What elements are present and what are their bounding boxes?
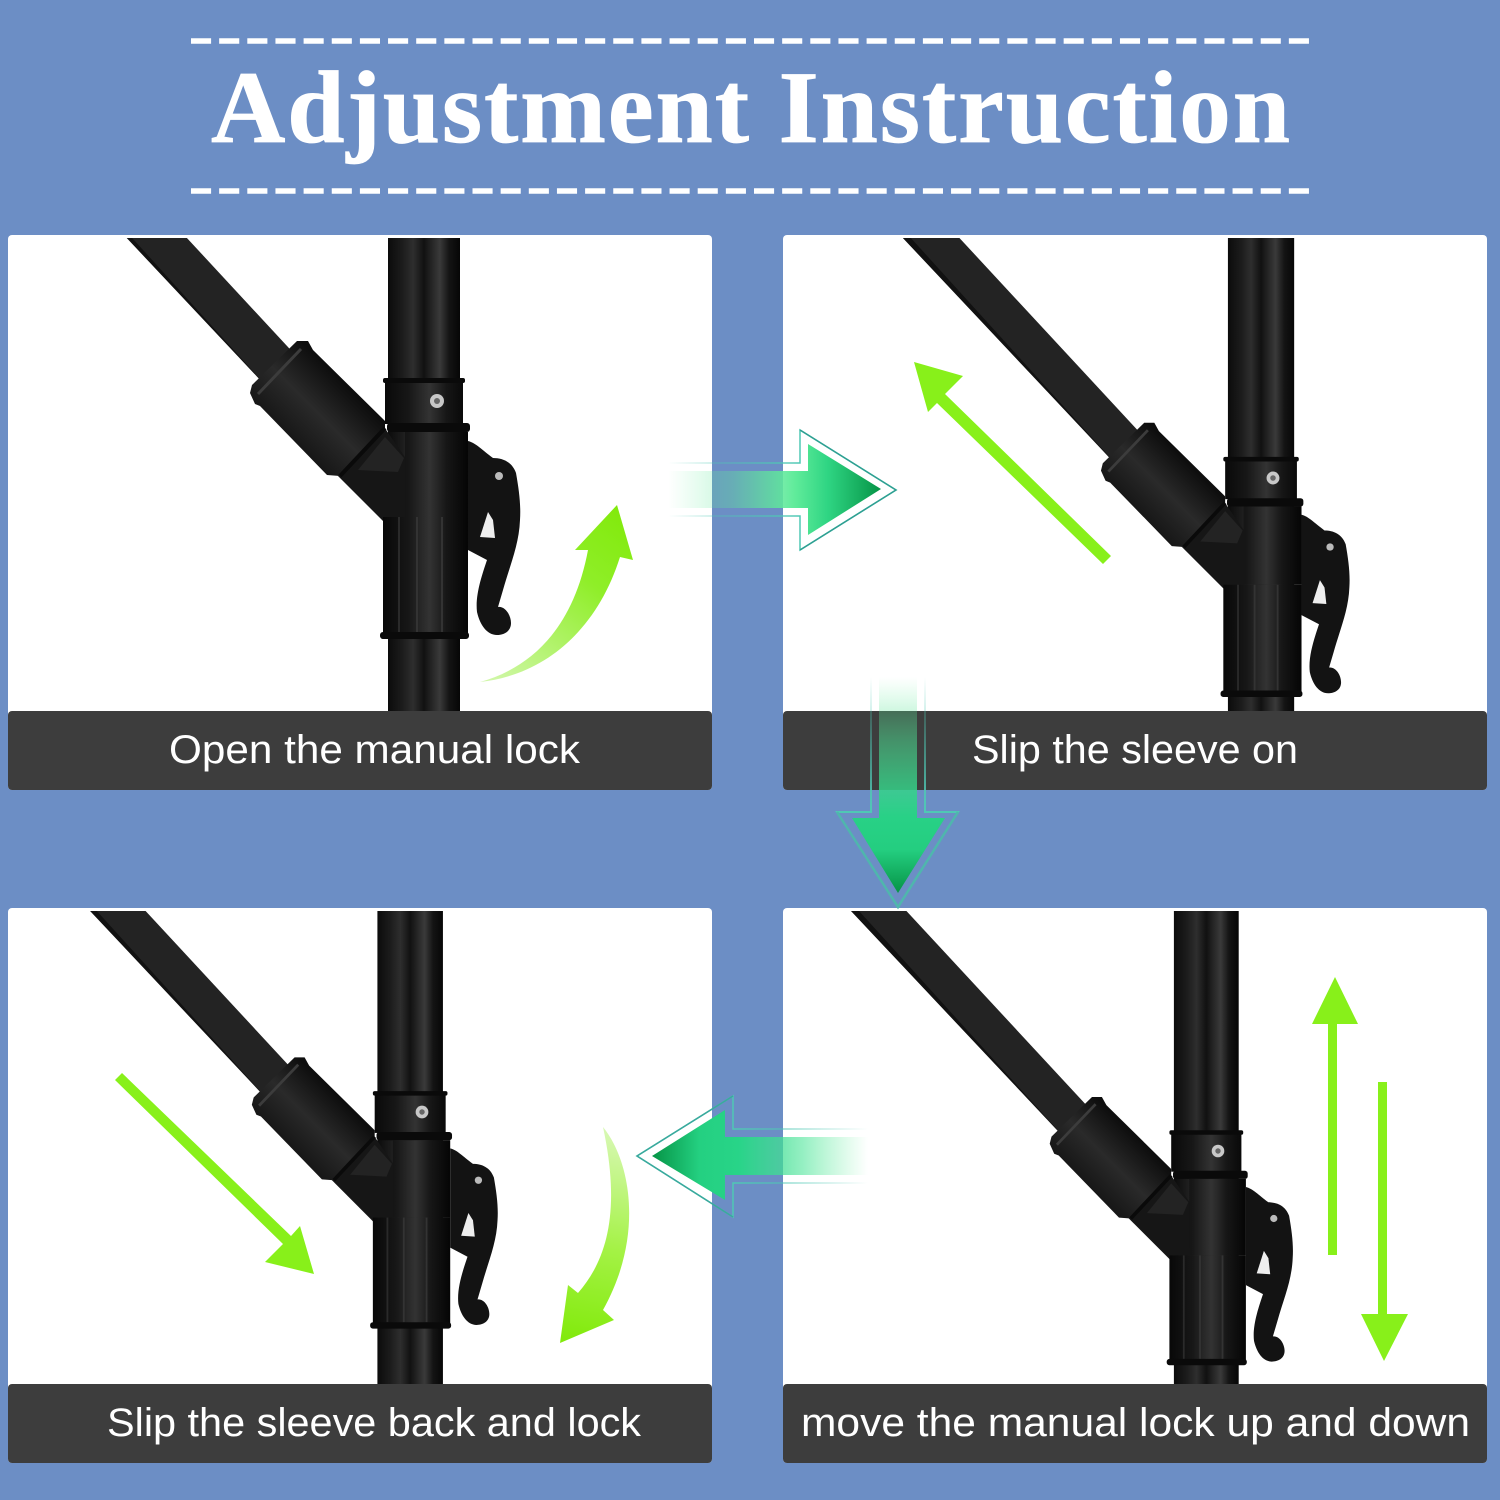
illustration: umbrella pole with sleeve raised	[903, 238, 1350, 711]
icon: straight green arrow down	[1361, 1082, 1408, 1361]
icon: curved green arrow down	[560, 1127, 629, 1343]
arrow: step one to step two	[668, 430, 896, 550]
caption	[8, 711, 712, 790]
arrow: step three to step four	[637, 1096, 868, 1217]
caption: Slip the sleeve on	[972, 728, 1298, 772]
caption	[8, 1384, 712, 1463]
caption: move the manual lock up and down	[801, 1401, 1470, 1445]
icon: straight green arrow up	[1312, 977, 1358, 1255]
illustration: umbrella pole with sleeve lowered	[90, 911, 498, 1384]
icon: straight green arrow down-right	[115, 1073, 314, 1274]
icon: straight green arrow up-left	[914, 362, 1111, 564]
illustration: umbrella pole with sliding lock	[851, 911, 1293, 1384]
panel: slip the sleeve back and lock	[8, 908, 712, 1463]
panel: slip the sleeve on	[783, 201, 1487, 808]
caption	[783, 711, 1487, 790]
arrow: step two to step three	[837, 677, 958, 907]
panel: open the manual lock	[8, 235, 712, 790]
caption: Open the manual lock	[169, 728, 581, 772]
caption: Slip the sleeve back and lock	[107, 1401, 642, 1445]
icon: curved green arrow up	[480, 505, 633, 682]
panel: move the manual lock up and down	[783, 880, 1487, 1474]
title: Adjustment Instruction	[211, 51, 1290, 165]
illustration: umbrella pole with lock closed	[126, 238, 520, 711]
caption	[783, 1384, 1487, 1463]
